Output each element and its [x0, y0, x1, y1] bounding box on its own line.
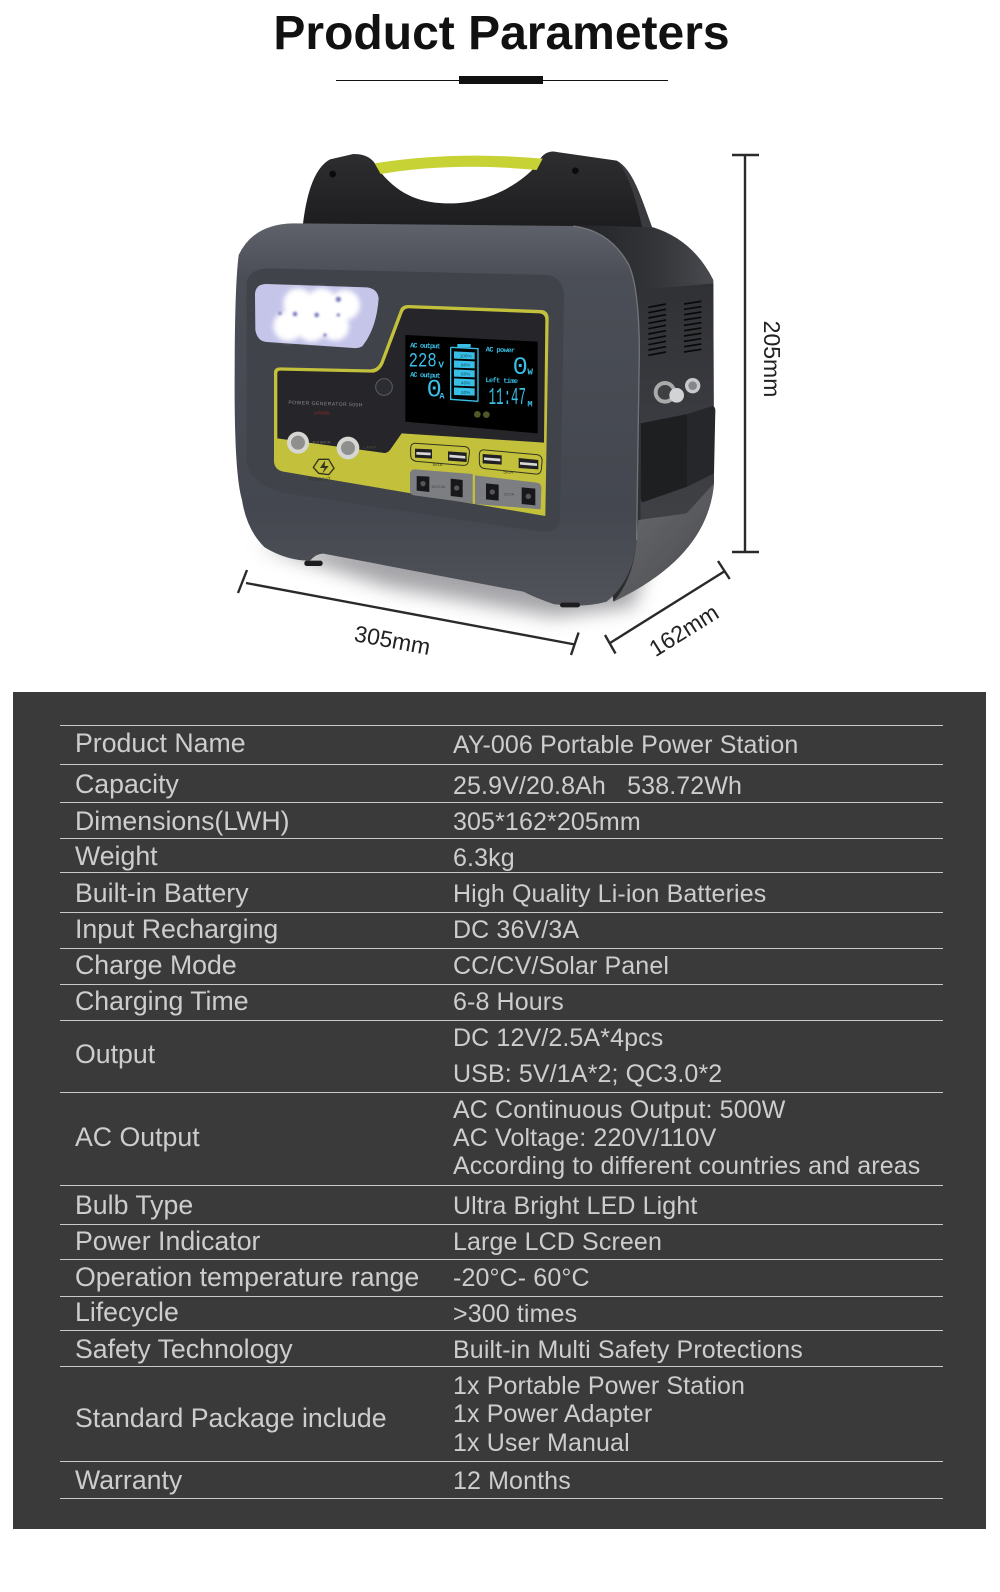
row: standard package: 1x User Manual: [453, 1429, 630, 1457]
DC ports: [410, 469, 541, 509]
row: input recharging: Input Recharging: [75, 914, 278, 944]
row: AC output: AC Output: [75, 1122, 200, 1152]
row: capacity: 25.9V/20.8Ah 538.72Wh: [453, 772, 742, 800]
row: output: Output: [75, 1039, 155, 1069]
shell highlight: [573, 226, 639, 540]
row: operation temperature: Operation temperature range: [75, 1262, 419, 1292]
LCD screen: AC output: [410, 342, 441, 351]
panel: specifications table: [13, 692, 986, 1529]
row: bulb type: [60, 1185, 943, 1224]
row: safety technology: Built-in Multi Safety Protections: [453, 1336, 803, 1364]
LCD screen: 0: [513, 353, 528, 382]
row: dimensions: 305*162*205mm: [453, 808, 641, 836]
row: power indicator: Power Indicator: [75, 1226, 260, 1256]
row: charging time: [60, 984, 943, 1020]
front recess: [247, 268, 564, 532]
row: weight: Weight: [75, 841, 158, 871]
row: AC output: AC Continuous Output: 500W: [453, 1096, 785, 1124]
vents: [648, 301, 701, 355]
length dimension 305mm: 305mm: [352, 620, 433, 660]
LCD screen: 228: [409, 351, 437, 374]
brand logo: [309, 459, 334, 482]
yellow control panel: [274, 305, 549, 516]
front shell: [235, 223, 639, 606]
rubber socket covers: [641, 414, 687, 502]
row: power indicator: [60, 1224, 943, 1259]
height dimension 205mm: 205mm: [759, 321, 785, 397]
row: charge mode: CC/CV/Solar Panel: [453, 952, 669, 980]
row: operation temperature: [60, 1259, 943, 1296]
row: warranty: Warranty: [75, 1465, 182, 1495]
row: dimensions: [60, 802, 943, 838]
row: standard package: 1x Portable Power Station: [453, 1372, 745, 1400]
brand logo: BOSSCAT: [309, 477, 331, 482]
power and lamp buttons: POWER: [313, 439, 331, 444]
row: output: DC 12V/2.5A*4pcs: [453, 1024, 663, 1052]
LCD screen: AC power: [486, 346, 515, 355]
height dimension 205mm: [732, 155, 785, 552]
row: product name: AY-006 Portable Power Station: [453, 731, 798, 759]
product illustration with dimensions: [234, 152, 785, 662]
row: input recharging: DC 36V/3A: [453, 916, 579, 944]
battery gauge: [451, 344, 478, 401]
row: built-in battery: High Quality Li-ion Batteries: [453, 880, 766, 908]
USB ports: 5V1A: [433, 462, 443, 467]
AC knob and fuse: [654, 378, 700, 404]
brand text on panel: AY006: [314, 411, 329, 416]
title underline rule: [336, 76, 668, 84]
row: warranty: 12 Months: [453, 1467, 571, 1495]
row: standard package: [60, 1366, 943, 1461]
LCD screen: Left time: [485, 377, 518, 386]
floor shadow: [257, 545, 650, 617]
row: warranty: [60, 1461, 943, 1498]
row: weight: [60, 838, 943, 872]
battery gauge: 80%: [461, 363, 470, 368]
lower side facet: [613, 483, 714, 602]
depth dimension 162mm: [605, 561, 730, 662]
depth dimension 162mm: 162mm: [644, 599, 723, 662]
title: Product Parameters: [273, 7, 730, 60]
row: capacity: [60, 764, 943, 802]
battery gauge: 40%: [461, 381, 470, 386]
DC ports: 12V2.5A: [431, 485, 446, 489]
mode button: [376, 379, 392, 395]
power and lamp buttons: [287, 432, 377, 459]
row: built-in battery: [60, 872, 943, 912]
dark display panel: [277, 308, 545, 453]
feet: [304, 561, 580, 607]
row: charge mode: Charge Mode: [75, 950, 237, 980]
row: output: USB: 5V/1A*2; QC3.0*2: [453, 1060, 722, 1088]
row: standard package: Standard Package include: [75, 1403, 387, 1433]
LCD screen: 11:47: [489, 385, 526, 412]
row: lifecycle: Lifecycle: [75, 1297, 179, 1327]
LCD screen: M: [527, 400, 533, 410]
row: charge mode: [60, 948, 943, 984]
LCD screen: W: [527, 367, 533, 378]
DC ports: 12V1A: [503, 492, 515, 496]
battery gauge: 100%: [460, 354, 472, 359]
row: output: [60, 1020, 943, 1092]
row: input recharging: [60, 912, 943, 948]
power and lamp buttons: LAMP: [363, 445, 377, 450]
row: product name: Product Name: [75, 728, 246, 758]
row: lifecycle: [60, 1296, 943, 1330]
row: lifecycle: >300 times: [453, 1300, 577, 1328]
indicator LEDs: [474, 411, 490, 418]
brand text on panel: [288, 400, 363, 416]
battery gauge: 60%: [461, 372, 470, 377]
row: AC output: According to different countries and areas: [453, 1152, 920, 1180]
LCD screen: [405, 335, 538, 433]
row: charging time: Charging Time: [75, 986, 249, 1016]
row: standard package: 1x Power Adapter: [453, 1400, 652, 1428]
row: charging time: 6-8 Hours: [453, 988, 564, 1016]
handle: [303, 152, 653, 237]
battery gauge: 20%: [461, 390, 470, 395]
side housing: [577, 225, 715, 602]
row: AC output: AC Voltage: 220V/110V: [453, 1124, 716, 1152]
row: bulb type: Bulb Type: [75, 1190, 193, 1220]
LED lamp: [255, 284, 379, 348]
row: capacity: Capacity: [75, 769, 179, 799]
row: bulb type: Ultra Bright LED Light: [453, 1192, 697, 1220]
LCD screen: V: [438, 359, 444, 370]
row: AC output: [60, 1092, 943, 1185]
LCD screen: A: [439, 392, 445, 402]
row: dimensions: Dimensions(LWH): [75, 806, 290, 836]
row: safety technology: [60, 1330, 943, 1366]
row: operation temperature: -20°C- 60°C: [453, 1264, 590, 1292]
LCD screen: 0: [427, 376, 442, 405]
row: built-in battery: Built-in Battery: [75, 878, 249, 908]
brand text on panel: POWER GENERATOR 500H: [288, 400, 363, 409]
row: safety technology: Safety Technology: [75, 1334, 293, 1364]
LCD screen: AC output: [410, 372, 441, 381]
row: power indicator: Large LCD Screen: [453, 1228, 662, 1256]
product: portable power station: [235, 152, 715, 617]
USB ports: 5V2A: [503, 470, 513, 475]
row: product name: [60, 725, 943, 764]
length dimension 305mm: [238, 570, 579, 660]
row: weight: 6.3kg: [453, 844, 515, 872]
USB ports: [411, 443, 542, 475]
